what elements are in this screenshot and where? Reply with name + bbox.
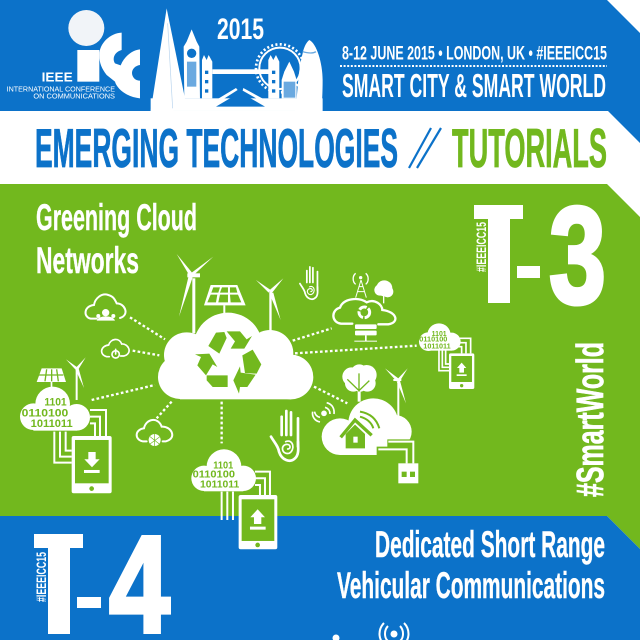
icon: bottom binary cloud: [191, 449, 270, 520]
label: T-3: [474, 175, 606, 334]
icon: upper right binary cloud: 0110100: [419, 337, 447, 344]
icon: upper right binary cloud: 1101: [432, 331, 447, 338]
central cloud: [158, 313, 313, 399]
icon: double slash: [409, 128, 441, 168]
icon: smart home cloud: [312, 364, 418, 483]
label: T-4: [34, 506, 170, 640]
outline cloud: recycling server: [333, 273, 395, 342]
icon: left binary cloud: [20, 357, 112, 493]
icon: left binary cloud: 0110100: [22, 408, 68, 420]
icon: second turbine: [256, 278, 283, 332]
title: Dedicated Short Range Vehicular Communications: [337, 524, 605, 606]
icon: small hand: [300, 267, 318, 299]
icon: main turbine: [177, 254, 213, 333]
logo: IEEE ICC: IEEE: [42, 70, 73, 85]
wifi arcs: [312, 403, 334, 422]
server stack: [354, 324, 377, 342]
diagram: central cloud network, left part: [20, 254, 313, 520]
logo: IEEE ICC: INTERNATIONAL CONFERENCE: [7, 84, 115, 93]
icon: small turbine: [66, 357, 86, 400]
text: 2015: 2015: [217, 13, 264, 46]
hashtag: #IEEEICC15 vertical (T-3): #IEEEICC15: [473, 222, 489, 272]
icon: small solar panel: [37, 368, 66, 388]
icon: tree: [374, 280, 393, 303]
icon: upper right binary cloud: [419, 323, 474, 389]
connector dots: [293, 328, 417, 403]
logo: IEEE ICC: [7, 10, 140, 101]
label: T-3: 3: [549, 179, 606, 333]
icon: left binary cloud: 1011011: [31, 418, 73, 430]
panel: green T-3 section: [0, 184, 640, 549]
tablet: bottom, overlapping sections: [239, 495, 277, 549]
wires: [377, 439, 416, 460]
panel: blue T-4 section: [0, 516, 640, 640]
hashtag: #SmartWorld: #SmartWorld: [570, 342, 612, 497]
socket box: [398, 463, 418, 483]
icon: tree: [342, 364, 377, 402]
wires: [54, 410, 106, 463]
title: Greening Cloud Networks: Greening Cloud: [36, 197, 197, 238]
tablet: [72, 436, 112, 493]
logo: IEEE ICC: ON COMMUNICATIONS: [33, 92, 115, 101]
label: T-3: T: [474, 175, 524, 334]
icon: mini recycle: [359, 307, 370, 318]
icon: bottom binary cloud: 1101: [213, 460, 234, 471]
illustration: London skyline: [151, 8, 323, 111]
house: [341, 412, 379, 448]
connector dots: [92, 317, 222, 443]
panel: header band: [0, 0, 640, 143]
hashtag: #IEEEICC15 vertical (T-4): #IEEEICC15: [33, 552, 49, 602]
diagram: right connectors and binary cloud: [293, 323, 474, 403]
icon: antenna signal: [380, 623, 408, 640]
icon: recycle symbol: [195, 331, 261, 394]
title: Greening Cloud Networks: Networks: [36, 240, 139, 281]
title: Greening Cloud Networks: [36, 197, 197, 281]
outline cloud: people: [86, 294, 126, 321]
icon: turbine: [385, 368, 408, 417]
icon: left binary cloud: 1101: [44, 397, 67, 409]
outline cloud: globe: [137, 420, 172, 446]
icon: upper right binary cloud: 1011011: [423, 343, 451, 350]
icon: bottom binary cloud: 0110100: [193, 469, 235, 480]
icon: solar panel: [204, 285, 246, 315]
outline cloud: power: [102, 339, 129, 358]
icon: large hand: [271, 411, 298, 461]
icon: figure head: [332, 634, 340, 640]
divider: dotted rule: [340, 65, 607, 67]
icon: cell tower: [353, 273, 368, 298]
icon: bottom binary cloud: 1011011: [200, 479, 240, 490]
